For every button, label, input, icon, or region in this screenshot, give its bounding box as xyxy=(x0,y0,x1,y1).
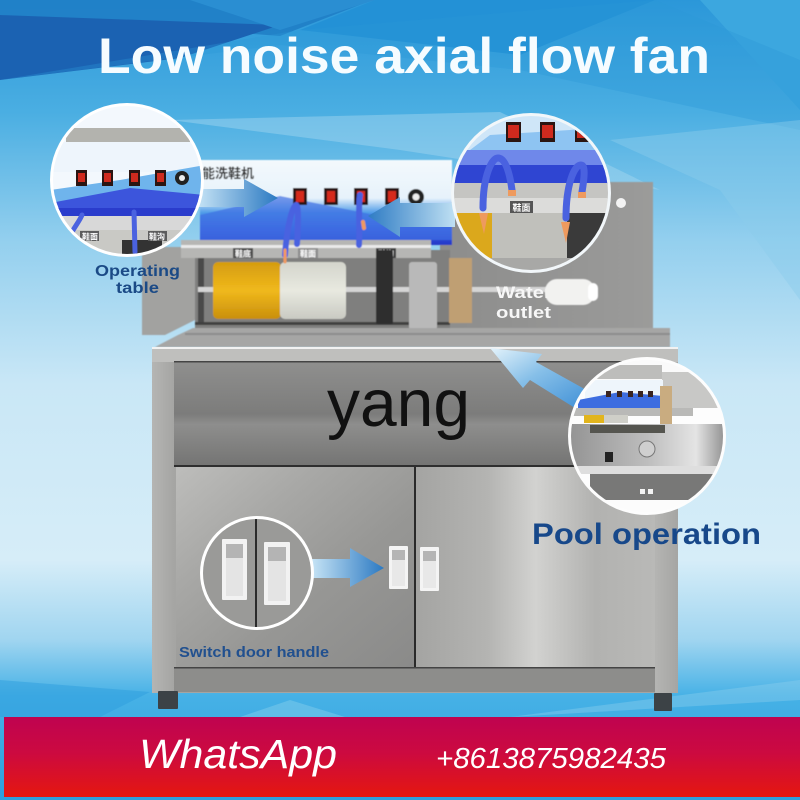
control panel xyxy=(200,160,452,245)
switches xyxy=(506,122,590,142)
top rim xyxy=(152,347,678,362)
arrow: pool operation xyxy=(490,348,590,408)
white side brush xyxy=(545,279,598,305)
rear steel backboard xyxy=(142,247,195,335)
right door xyxy=(416,467,655,668)
casters xyxy=(158,691,672,711)
panel switches xyxy=(293,188,424,205)
operating table label: table xyxy=(116,280,159,297)
front panel xyxy=(174,362,655,466)
nozzle tips xyxy=(479,190,586,243)
drive shaft xyxy=(198,287,548,292)
switch door handle label: Switch door handle xyxy=(179,645,329,661)
machine: washing unit xyxy=(142,160,670,347)
callout: water outlet xyxy=(450,110,617,278)
callout: operating table: 鞋沟 xyxy=(149,232,165,242)
water outlet label: Water xyxy=(496,283,552,302)
contact banner xyxy=(4,717,800,797)
right leg xyxy=(655,362,678,693)
water outlet label: outlet xyxy=(496,303,551,322)
pulley xyxy=(409,262,437,330)
arrow: door handle xyxy=(312,548,384,587)
tag rail: 鞋沟 xyxy=(378,248,394,258)
hoses xyxy=(72,212,135,252)
interior housing xyxy=(195,250,450,335)
callout: water outlet: 鞋面 xyxy=(512,202,531,213)
bottom rail xyxy=(174,668,655,692)
phone number: +8613875982435 xyxy=(436,743,667,775)
title: Low noise axial flow fan xyxy=(98,28,710,84)
left leg xyxy=(152,362,174,693)
bristle wheel xyxy=(376,250,393,324)
water nozzles xyxy=(285,195,364,262)
hoses xyxy=(483,158,584,218)
whatsapp label: WhatsApp xyxy=(139,731,337,777)
water outlet label xyxy=(496,283,552,322)
pool operation label: Pool operation xyxy=(532,518,761,551)
basin ledge xyxy=(155,328,670,347)
right steel splash panel xyxy=(440,182,653,335)
tag rail xyxy=(181,240,431,258)
banner background xyxy=(4,717,800,797)
tan sisal brush xyxy=(449,258,472,323)
cabinet xyxy=(152,347,678,711)
callout: operating table: 鞋面 xyxy=(82,232,98,242)
switches xyxy=(606,391,653,397)
tag rail: 鞋面 xyxy=(300,248,316,258)
switches xyxy=(76,170,189,186)
arrow: operating table xyxy=(198,179,278,217)
arrow: water outlet xyxy=(368,197,455,237)
door handles xyxy=(389,546,439,591)
operating table label: Operating xyxy=(95,263,180,280)
callout: door handle xyxy=(200,516,314,630)
callout: pool operation xyxy=(568,356,732,518)
callout: operating table xyxy=(50,100,210,260)
brand name: yang xyxy=(327,366,470,441)
roller brush xyxy=(213,262,346,319)
vent hole xyxy=(616,198,626,208)
tag rail: 鞋底 xyxy=(235,248,251,258)
operating table label xyxy=(95,263,180,297)
machine: washing unit: 能洗鞋机 xyxy=(202,166,254,181)
cabinet frame xyxy=(152,347,678,693)
left door xyxy=(176,467,414,668)
